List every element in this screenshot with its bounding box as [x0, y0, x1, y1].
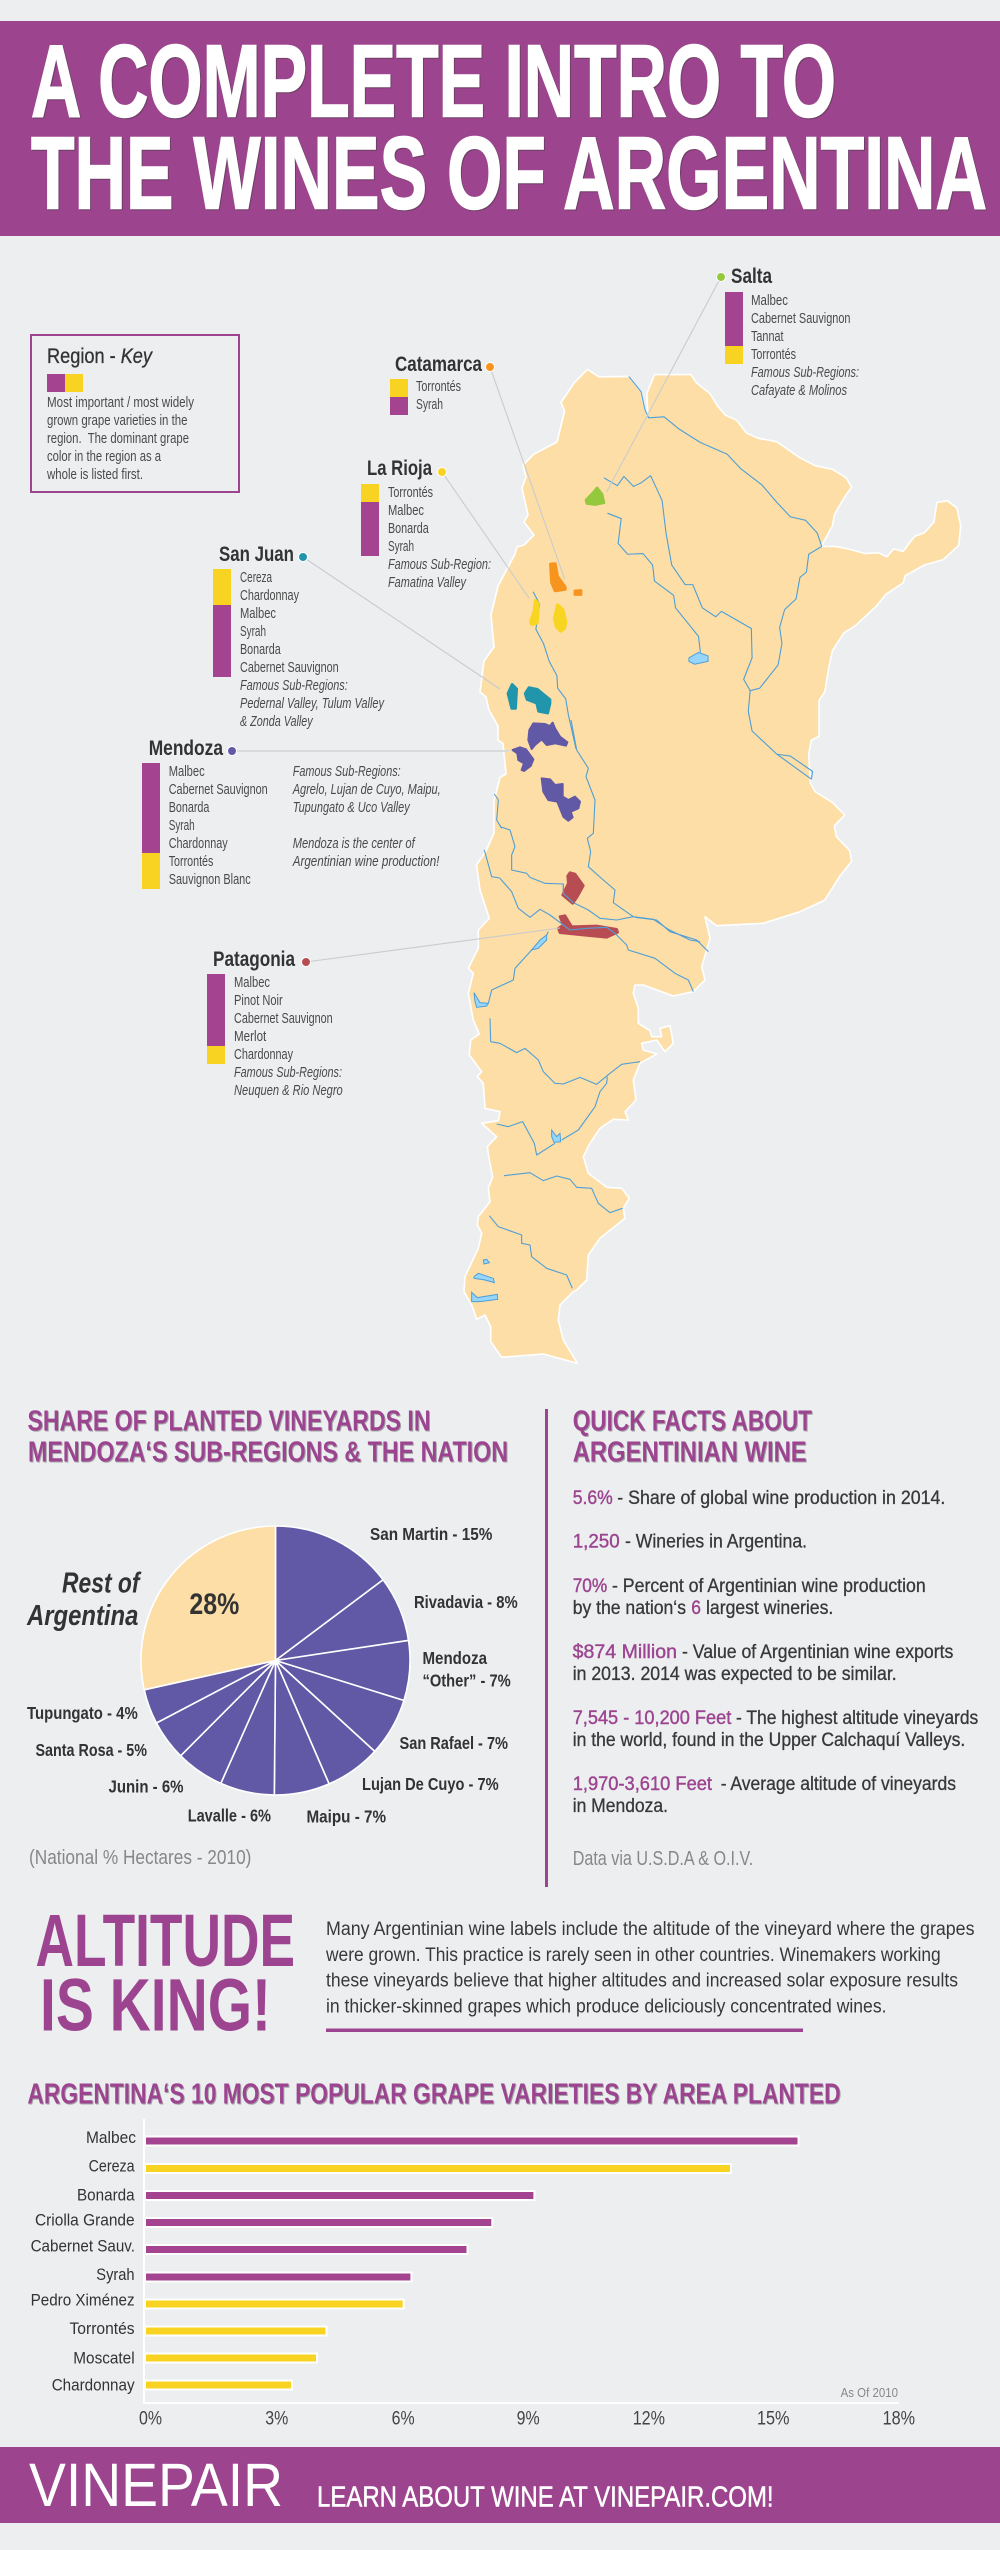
region label: San Juan: Cereza — [240, 570, 273, 586]
fact: Mendoza altitude — [573, 1774, 956, 1817]
pie labels: “Other” - 7% — [422, 1671, 511, 1691]
key description: color in the region as a — [47, 449, 162, 465]
region label: Patagonia: Cabernet Sauvignon — [234, 1011, 333, 1027]
region label: Patagonia: Pinot Noir — [234, 993, 283, 1009]
category labels: Malbec — [86, 2128, 136, 2147]
panel: share of planted vineyards — [26, 1406, 518, 1869]
axis tick labels: 6% — [392, 2408, 415, 2429]
title — [31, 24, 987, 230]
panel: quick facts — [545, 1406, 978, 1887]
region label: Patagonia: Chardonnay — [234, 1047, 294, 1063]
heading: share of planted vineyards: MENDOZA‘S SUB-REGIONS & THE NATION — [28, 1437, 508, 1469]
region label: Patagonia: Neuquen & Rio Negro — [234, 1083, 343, 1099]
region label: San Juan: Chardonnay — [240, 588, 300, 604]
fact: highest vineyards: - The highest altitude vineyards — [736, 1708, 978, 1729]
region label: Salta: Famous Sub-Regions: — [751, 365, 859, 381]
land outline — [464, 369, 961, 1363]
vineyard regions: Patagonia — [558, 873, 618, 937]
axis tick labels: 15% — [757, 2408, 790, 2429]
category labels: Bonarda — [77, 2186, 135, 2205]
region label: Catamarca: Catamarca — [395, 353, 482, 376]
heading: share of planted vineyards — [28, 1406, 508, 1469]
region label: La Rioja: Famatina Valley — [388, 575, 467, 591]
key description — [46, 395, 195, 483]
pie labels: San Martin - 15% — [370, 1524, 493, 1544]
vineyard regions: Mendoza — [513, 723, 580, 821]
category labels: Moscatel — [73, 2348, 135, 2367]
river across Patagonia vineyards — [500, 878, 628, 950]
region label: San Juan: Cabernet Sauvignon — [240, 660, 339, 676]
axis tick labels: 18% — [883, 2408, 915, 2429]
data source: Data via U.S.D.A & O.I.V. — [573, 1848, 753, 1870]
header banner — [0, 21, 1000, 236]
region label: Mendoza: Mendoza is the center of — [293, 836, 416, 852]
heading: share of planted vineyards: SHARE OF PLANTED VINEYARDS IN — [28, 1406, 430, 1438]
region label: La Rioja: Bonarda — [388, 521, 429, 537]
region label: La Rioja — [361, 457, 491, 591]
region label: San Juan: Syrah — [240, 624, 266, 640]
fact: Mendoza altitude: in Mendoza. — [573, 1796, 668, 1817]
key description: whole is listed first. — [46, 467, 143, 483]
region label: Patagonia — [207, 948, 343, 1099]
key heading: Region - Key — [47, 345, 153, 368]
panel: grape varieties chart — [27, 2078, 915, 2429]
region label: San Juan — [213, 543, 385, 730]
region label: Patagonia: Merlot — [234, 1029, 266, 1045]
pie labels: Rivadavia - 8% — [414, 1592, 518, 1612]
pie callout: rest of Argentina: Argentina — [26, 1600, 138, 1632]
pie callout: rest of Argentina — [26, 1568, 142, 1632]
region label: San Juan: Pedernal Valley, Tulum Valley — [240, 696, 385, 712]
region label: Mendoza: Bonarda — [169, 800, 210, 816]
vineyard regions: Catamarca — [551, 564, 581, 594]
category labels: Cabernet Sauv. — [31, 2237, 135, 2256]
vineyard regions: La Rioja — [531, 601, 566, 631]
axis tick labels: 3% — [265, 2408, 288, 2429]
region label: La Rioja: La Rioja — [367, 457, 432, 480]
pie labels: Lavalle - 6% — [188, 1806, 271, 1826]
fact: wineries: 1,250 — [573, 1532, 620, 1553]
region label: Mendoza: Syrah — [169, 818, 195, 834]
region label: Mendoza: Sauvignon Blanc — [169, 872, 251, 888]
fact: exports — [573, 1642, 953, 1685]
heading: quick facts — [573, 1406, 812, 1469]
pie labels: Tupungato - 4% — [27, 1703, 138, 1723]
altitude paragraph: were grown. This practice is rarely seen in other countries. Winemakers working — [325, 1945, 941, 1966]
region label: Mendoza: Torrontés — [169, 854, 213, 870]
panel: region key — [31, 335, 239, 492]
vineyard regions: San Juan — [508, 684, 550, 713]
altitude paragraph: in thicker-skinned grapes which produce deliciously concentrated wines. — [326, 1997, 886, 2018]
panel: altitude is king — [36, 1899, 974, 2046]
pie labels: Lujan De Cuyo - 7% — [362, 1774, 499, 1794]
region label: La Rioja: Malbec — [388, 503, 424, 519]
region label: La Rioja: Famous Sub-Region: — [388, 557, 491, 573]
key description: region. The dominant grape — [47, 431, 189, 447]
region label: Catamarca: Torrontés — [416, 379, 461, 395]
region label: Salta: Tannat — [751, 329, 784, 345]
fact: largest wineries: - Percent of Argentinian wine production — [612, 1576, 926, 1597]
region label: Salta: Cabernet Sauvignon — [751, 311, 850, 327]
leader lines — [232, 277, 721, 962]
region label: San Juan: Malbec — [240, 606, 276, 622]
axis tick labels: 0% — [139, 2408, 162, 2429]
region label: San Juan: San Juan — [219, 543, 294, 566]
fact: wineries: - Wineries in Argentina. — [625, 1532, 807, 1553]
rivers and lakes, south — [472, 917, 708, 1302]
category labels: Criolla Grande — [35, 2211, 135, 2230]
region label: Salta — [716, 265, 859, 399]
altitude paragraph — [325, 1919, 974, 2018]
pie value: 28%: 28% — [189, 1588, 239, 1621]
fact: Mendoza altitude: 1,970-3,610 Feet — [573, 1774, 713, 1795]
fact: largest wineries: largest wineries. — [706, 1598, 833, 1619]
fact: largest wineries: by the nation‘s — [573, 1598, 686, 1619]
region label: San Juan: Bonarda — [240, 642, 281, 658]
pie labels — [27, 1524, 518, 1827]
region label: Mendoza: Chardonnay — [169, 836, 228, 852]
key description: Most important / most widely — [47, 395, 195, 411]
region label: Mendoza: Cabernet Sauvignon — [169, 782, 268, 798]
fact: largest wineries: 70% — [573, 1576, 607, 1597]
pie callout: rest of Argentina: Rest of — [62, 1568, 142, 1600]
pie labels: Maipu - 7% — [306, 1807, 386, 1827]
bar chart — [31, 2119, 915, 2429]
rivers and lakes, north — [533, 376, 822, 779]
category labels: Chardonnay — [52, 2376, 135, 2395]
date note: As Of 2010 — [841, 2385, 898, 2400]
heading: quick facts: QUICK FACTS ABOUT — [573, 1406, 812, 1438]
altitude heading: ALTITUDE — [36, 1899, 295, 1982]
fact: largest wineries — [573, 1576, 926, 1619]
key swatches — [47, 374, 83, 392]
region label: Salta: Cafayate & Molinos — [751, 383, 847, 399]
heading: quick facts: ARGENTINIAN WINE — [573, 1437, 807, 1469]
fact: highest vineyards: 7,545 - 10,200 Feet — [573, 1708, 732, 1729]
vineyard regions: Salta — [586, 488, 604, 505]
fact: highest vineyards — [573, 1708, 978, 1751]
fact: share of global production: - Share of global wine production in 2014. — [617, 1488, 945, 1509]
fact: highest vineyards: in the world, found in the Upper Calchaquí Valleys. — [573, 1730, 965, 1751]
region label: Mendoza — [142, 737, 441, 889]
region label: Catamarca: Syrah — [416, 397, 443, 413]
region label: Mendoza: Malbec — [169, 764, 205, 780]
region label: San Juan: Famous Sub-Regions: — [240, 678, 348, 694]
category labels — [31, 2128, 136, 2395]
region label: La Rioja: Torrontés — [388, 485, 433, 501]
region label: Catamarca — [390, 353, 494, 415]
bars — [145, 2136, 798, 2390]
footer banner — [0, 2447, 1000, 2523]
category labels: Syrah — [96, 2265, 135, 2284]
altitude heading — [36, 1899, 295, 2046]
axis tick labels — [139, 2408, 915, 2429]
category labels: Cereza — [89, 2157, 135, 2176]
altitude paragraph: these vineyards believe that higher altitudes and increased solar exposure results — [326, 1971, 958, 1992]
region label: La Rioja: Syrah — [388, 539, 414, 555]
axis tick labels: 12% — [633, 2408, 665, 2429]
pie labels: Santa Rosa - 5% — [36, 1740, 147, 1760]
axis tick labels: 9% — [517, 2408, 540, 2429]
category labels: Torrontés — [70, 2319, 135, 2338]
region label: San Juan: & Zonda Valley — [240, 714, 313, 730]
pie chart — [141, 1526, 410, 1795]
category labels: Pedro Ximénez — [31, 2291, 135, 2310]
region label: Salta: Malbec — [751, 293, 788, 309]
pie labels: Junin - 6% — [108, 1777, 184, 1797]
altitude heading: IS KING! — [40, 1964, 271, 2046]
region label: Patagonia: Famous Sub-Regions: — [234, 1065, 342, 1081]
region label: Patagonia: Patagonia — [213, 948, 295, 971]
key description: grown grape varieties in the — [47, 413, 188, 429]
map of Argentina — [464, 369, 961, 1363]
pie labels: San Rafael - 7% — [400, 1733, 508, 1753]
rivers, centre — [500, 720, 700, 942]
region label: Mendoza: Tupungato & Uco Valley — [293, 800, 410, 816]
region label: Salta: Torrontés — [751, 347, 796, 363]
altitude paragraph: Many Argentinian wine labels include the altitude of the vineyard where the grapes — [326, 1919, 974, 1940]
region label: Mendoza: Famous Sub-Regions: — [293, 764, 401, 780]
region label: Salta: Salta — [731, 265, 772, 288]
fact: share of global production: 5.6% — [573, 1488, 613, 1509]
fact: exports: in 2013. 2014 was expected to be similar. — [573, 1664, 897, 1685]
logo wordmark: VINEPAIR — [29, 2451, 283, 2519]
fact: largest wineries: 6 — [691, 1598, 701, 1619]
fact: exports: - Value of Argentinian wine exports — [682, 1642, 953, 1663]
fact: exports: $874 Million — [573, 1642, 677, 1663]
source note: (National % Hectares - 2010) — [29, 1847, 251, 1869]
region label: Patagonia: Malbec — [234, 975, 270, 991]
region label: Mendoza: Argentinian wine production! — [292, 854, 439, 870]
fact: Mendoza altitude: - Average altitude of vineyards — [721, 1774, 956, 1795]
pie labels: Mendoza — [422, 1648, 487, 1668]
region label: Mendoza: Agrelo, Lujan de Cuyo, Maipu, — [292, 782, 441, 798]
footer call to action: LEARN ABOUT WINE AT VINEPAIR.COM! — [317, 2482, 774, 2514]
region label: Mendoza: Mendoza — [149, 737, 223, 760]
